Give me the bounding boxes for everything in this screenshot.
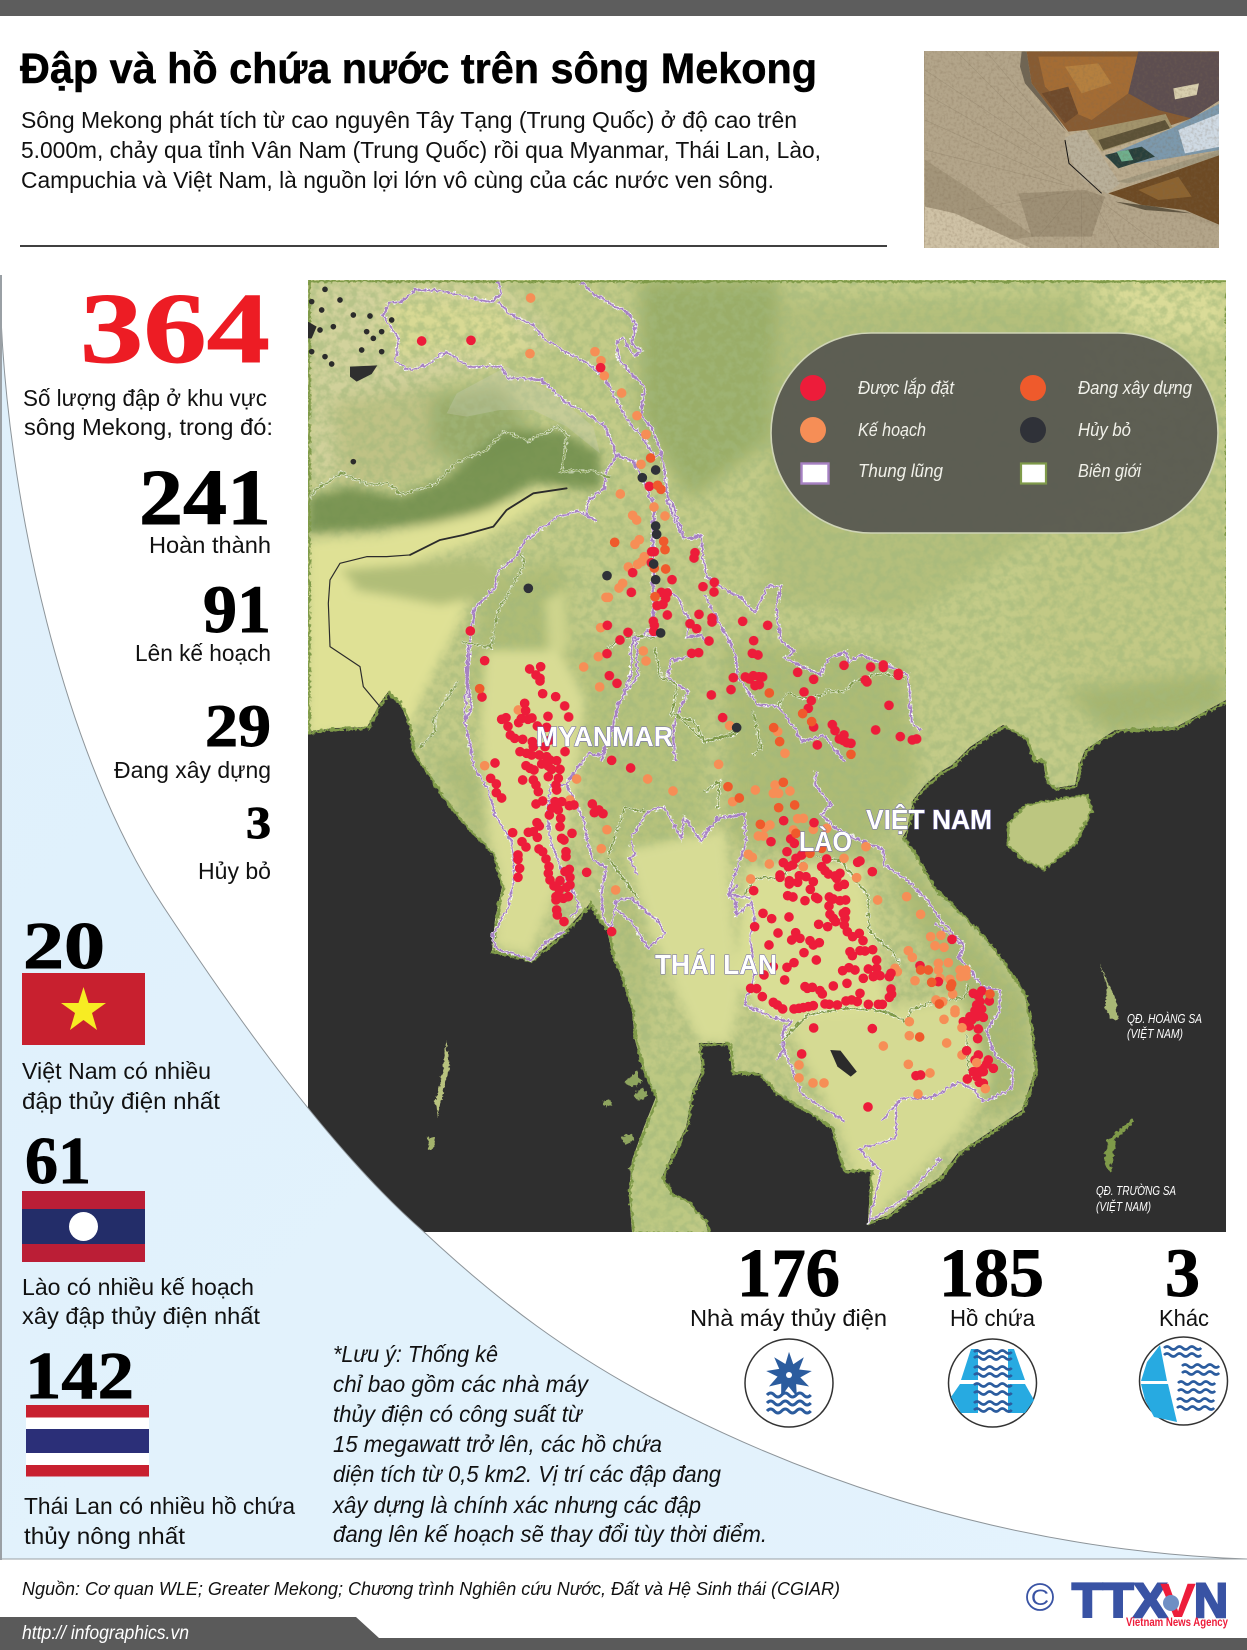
legend: Kế hoạch [858, 420, 926, 440]
stat: Thailand: Thái Lan có nhiều hồ chứa [24, 1493, 295, 1519]
stat: total dams: 364 [80, 272, 270, 384]
note text [332, 1341, 767, 1547]
intro text: Campuchia và Việt Nam, là nguồn lợi lớn vô cùng của các nước ven sông. [21, 167, 774, 193]
snow [447, 367, 600, 453]
top bar [0, 0, 1247, 16]
footer bar [0, 1617, 1247, 1650]
footer bar: http:// infographics.vn [22, 1623, 189, 1644]
lakes and rivers [308, 289, 567, 707]
stat: other [1140, 1235, 1228, 1425]
archipelago labels: (VIỆT NAM) [1096, 1199, 1151, 1214]
stat: reservoirs: Hồ chứa [950, 1305, 1035, 1331]
stat: under construction: 29 [205, 693, 271, 759]
country labels: LÀO [799, 826, 852, 857]
legend: Được lắp đặt [858, 378, 955, 398]
archipelago labels: QĐ. TRƯỜNG SA [1096, 1183, 1176, 1198]
stat: planned: 91 [203, 571, 271, 647]
stat: hydropower plants: Nhà máy thủy điện [690, 1305, 887, 1331]
stat: Thailand: thủy nông nhất [24, 1523, 186, 1549]
stat: other: 3 [1165, 1235, 1200, 1311]
stat: planned [135, 571, 271, 666]
country labels: VIỆT NAM [866, 804, 992, 835]
logo: TTXVN: N [1194, 1575, 1228, 1628]
stat: Laos: 61 [25, 1124, 91, 1198]
note text: chỉ bao gồm các nhà máy [333, 1371, 589, 1397]
land [308, 280, 1226, 1232]
icon: Laos flag [22, 1191, 145, 1262]
legend [771, 333, 1218, 533]
country labels: MYANMAR [536, 721, 673, 752]
country labels [536, 721, 992, 980]
legend: Đang xây dựng [1078, 378, 1192, 398]
river basin outlines [382, 280, 1012, 1220]
icon: Vietnam flag [22, 973, 145, 1045]
stat: planned: Lên kế hoạch [135, 640, 271, 666]
legend: Thung lũng [858, 461, 943, 481]
stat: cancelled [198, 797, 271, 884]
title: Đập và hồ chứa nước trên sông Mekong [20, 45, 817, 93]
stat: Vietnam: đập thủy điện nhất [22, 1088, 221, 1114]
country labels: THÁI LAN [655, 949, 777, 980]
stat: Thailand [24, 1339, 295, 1549]
stat: hydropower plants [690, 1235, 887, 1427]
legend: Biên giới [1078, 461, 1142, 481]
stat: hydropower plants: 176 [737, 1235, 840, 1311]
icon: reservoir dam [948, 1339, 1036, 1427]
national borders [308, 425, 968, 1080]
stat: Thailand: 142 [25, 1339, 134, 1413]
stat: total dams: Số lượng đập ở khu vực [23, 385, 267, 411]
intro text: 5.000m, chảy qua tỉnh Vân Nam (Trung Quốc) rồi qua Myanmar, Thái Lan, Lào, [21, 137, 821, 163]
coast [308, 280, 1226, 1232]
note text: xây dựng là chính xác nhưng các đập [332, 1492, 701, 1518]
intro text: Sông Mekong phát tích từ cao nguyên Tây Tạng (Trung Quốc) ở độ cao trên [21, 107, 797, 133]
dam points [422, 298, 993, 1107]
logo: TTXVN: TTX [1072, 1575, 1167, 1628]
photo: dam [924, 50, 1221, 250]
stat: Vietnam: 20 [23, 909, 105, 983]
stat: Laos [22, 1124, 261, 1329]
stat: Laos: Lào có nhiều kế hoạch [22, 1274, 254, 1300]
islands [427, 793, 1132, 1173]
legend: Hủy bỏ [1078, 420, 1131, 440]
note text: diện tích từ 0,5 km2. Vị trí các đập đang [333, 1461, 721, 1487]
archipelago labels [1096, 1011, 1202, 1214]
note text: 15 megawatt trở lên, các hồ chứa [333, 1431, 662, 1457]
stat: cancelled: Hủy bỏ [198, 858, 271, 884]
logo: TTXVN [1027, 1575, 1229, 1629]
stat: total dams [23, 272, 273, 440]
icon: Thailand flag [26, 1405, 149, 1476]
stat: cancelled: 3 [246, 797, 271, 848]
note text: thủy điện có công suất từ [333, 1401, 583, 1427]
icon: other water works [1140, 1337, 1228, 1425]
stat: completed: 241 [139, 455, 271, 542]
stat: Vietnam [22, 909, 221, 1114]
note text: *Lưu ý: Thống kê [333, 1341, 498, 1367]
map [308, 280, 1226, 1232]
stat: total dams: sông Mekong, trong đó: [24, 414, 273, 440]
icon: turbine wheel [745, 1339, 833, 1427]
stat: reservoirs: 185 [939, 1235, 1044, 1311]
archipelago labels: (VIỆT NAM) [1127, 1026, 1183, 1041]
logo: TTXVN: C [1031, 1585, 1049, 1610]
stat: other: Khác [1159, 1305, 1209, 1331]
stat: completed: Hoàn thành [149, 532, 271, 558]
light blue curved background [0, 290, 1247, 1559]
logo: TTXVN: V [1160, 1575, 1196, 1628]
logo: TTXVN: Vietnam News Agency [1126, 1617, 1229, 1629]
source line: Nguồn: Cơ quan WLE; Greater Mekong; Chương trình Nghiên cứu Nước, Đất và Hệ Sinh thái (CGIAR) [22, 1578, 840, 1599]
stat: Vietnam: Việt Nam có nhiều [22, 1058, 211, 1084]
stat: under construction [114, 693, 271, 783]
stat: Laos: xây đập thủy điện nhất [22, 1303, 261, 1329]
intro text [21, 107, 821, 193]
note text: đang lên kế hoạch sẽ thay đổi tùy thời điểm. [333, 1521, 767, 1547]
archipelago labels: QĐ. HOÀNG SA [1127, 1011, 1202, 1026]
stat: under construction: Đang xây dựng [114, 757, 271, 783]
stat: reservoirs [939, 1235, 1044, 1427]
